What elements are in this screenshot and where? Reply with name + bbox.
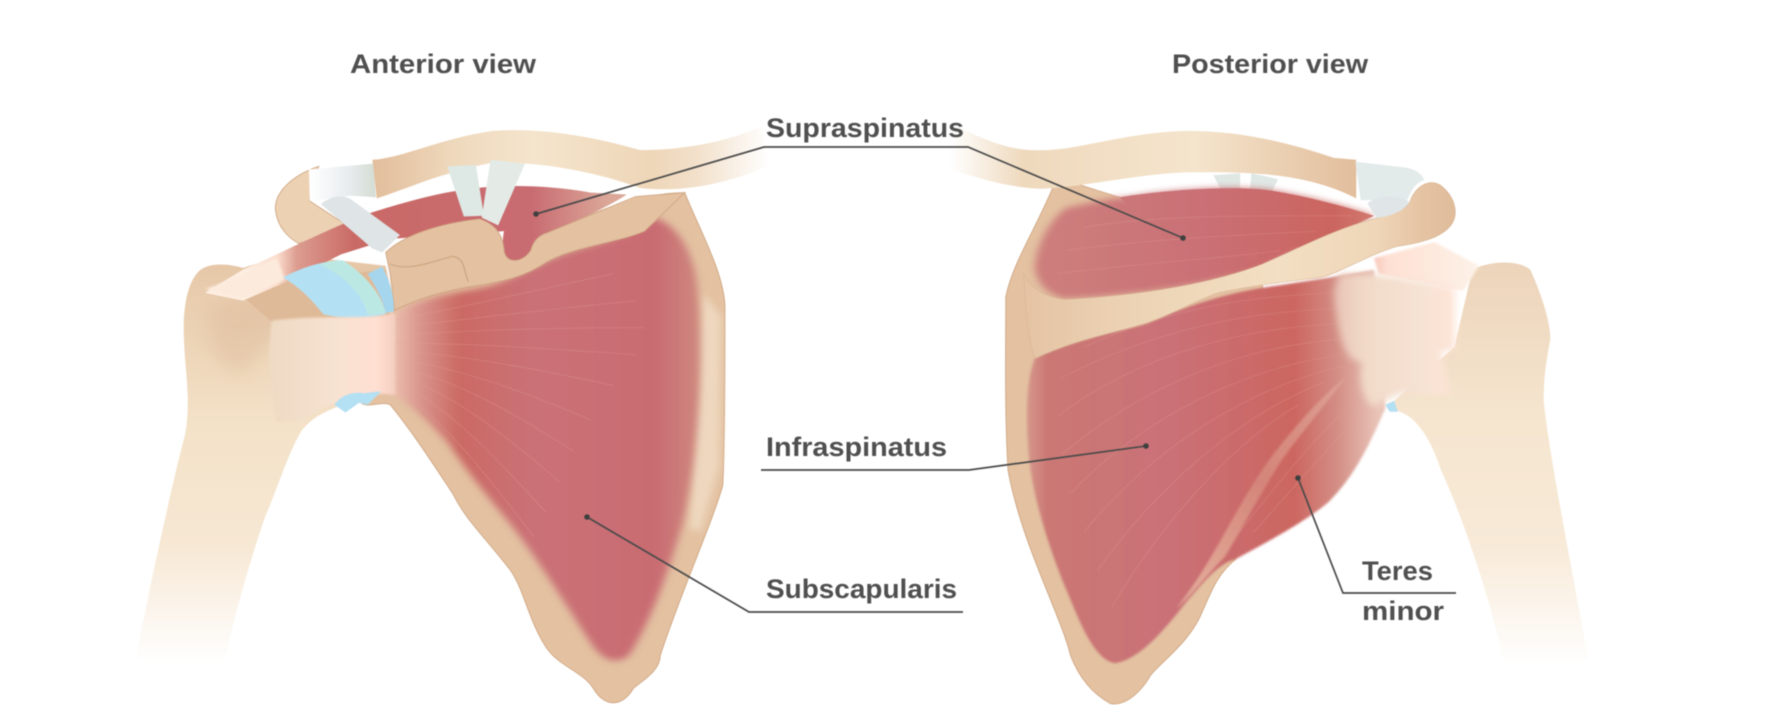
label: teres minor: Teres <box>1362 556 1433 586</box>
title: anterior view: Anterior view <box>350 49 537 79</box>
acromioclavicular ligament <box>1355 162 1424 200</box>
scapular spine and acromion <box>1024 182 1455 358</box>
humerus <box>1390 262 1588 659</box>
infraspinatus tendon <box>1334 274 1454 407</box>
teres minor border <box>1175 376 1347 609</box>
label: teres minor: minor <box>1362 596 1445 626</box>
supraspinatus tendon cap <box>205 258 285 299</box>
coracoclavicular ligaments <box>447 160 525 225</box>
subscapularis muscle <box>390 218 700 661</box>
leader: teres minor <box>1295 475 1456 593</box>
coracoacromial ligament <box>1367 196 1409 218</box>
infraspinatus and teres minor muscle <box>1027 216 1385 663</box>
scapula body <box>1006 177 1262 704</box>
supraspinatus tendon <box>1374 242 1479 291</box>
lower joint capsule <box>1385 401 1398 412</box>
label: supraspinatus: Supraspinatus <box>766 113 964 143</box>
illustration: posterior shoulder <box>950 123 1588 704</box>
coracoid and scapular neck <box>386 193 685 310</box>
muscle fibres <box>1057 216 1370 609</box>
acromioclavicular ligament <box>309 164 376 201</box>
leader: supraspinatus <box>533 147 1186 241</box>
coracoacromial ligament <box>321 196 400 252</box>
subscapularis tendon <box>270 313 396 422</box>
supraspinatus muscle <box>1035 188 1374 299</box>
leader: subscapularis <box>584 514 963 612</box>
leader: infraspinatus <box>761 443 1149 470</box>
label: subscapularis: Subscapularis <box>766 574 957 604</box>
coracoclavicular ligaments <box>1213 173 1278 193</box>
lower joint capsule <box>334 391 381 412</box>
supraspinatus muscle <box>205 186 627 301</box>
scapula body <box>361 193 725 703</box>
illustration: anterior shoulder <box>136 127 770 703</box>
clavicle <box>372 127 770 198</box>
humerus <box>136 254 395 659</box>
title: posterior view: Posterior view <box>1172 49 1369 79</box>
muscle fibres <box>395 274 645 536</box>
label: infraspinatus: Infraspinatus <box>766 432 947 462</box>
glenoid cartilage <box>283 260 394 318</box>
acromion <box>275 166 350 244</box>
clavicle <box>950 123 1356 198</box>
